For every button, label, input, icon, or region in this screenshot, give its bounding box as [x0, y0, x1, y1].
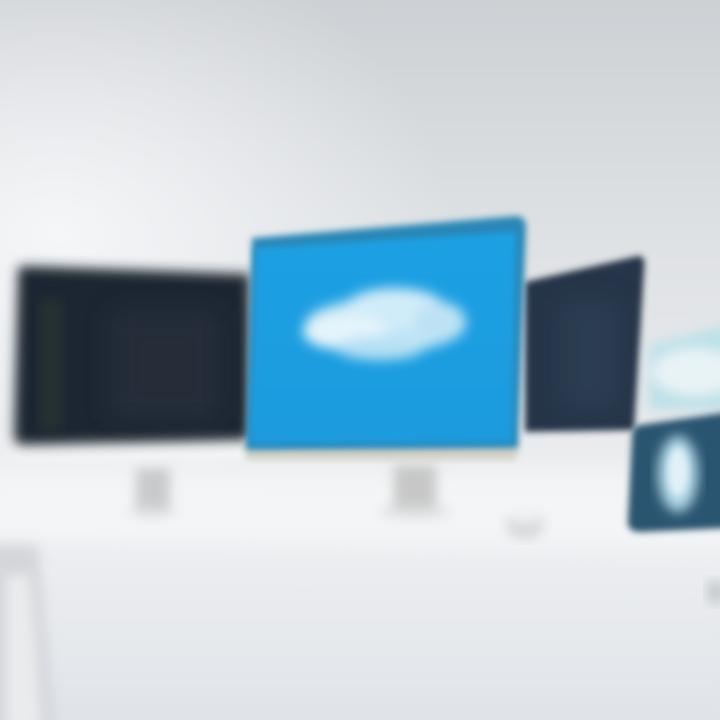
desk leg left — [0, 545, 55, 720]
left monitor — [13, 266, 250, 517]
icon: phone — [628, 412, 720, 532]
centre monitor — [244, 216, 526, 518]
small desk object — [506, 511, 544, 539]
desk corner shadow — [707, 580, 720, 604]
centre monitor frame — [246, 216, 526, 450]
centre monitor chin — [244, 440, 518, 460]
left monitor bezel — [13, 280, 250, 457]
left monitor stand — [128, 468, 176, 517]
right monitor screen — [525, 256, 644, 432]
desk surface — [0, 470, 720, 720]
icon: cloud on screen — [303, 288, 466, 360]
centre monitor screen — [250, 232, 516, 444]
right panel: light cloud tile — [648, 325, 720, 410]
left monitor screen — [14, 266, 250, 445]
centre monitor stand — [379, 465, 451, 518]
right monitor — [525, 256, 644, 432]
